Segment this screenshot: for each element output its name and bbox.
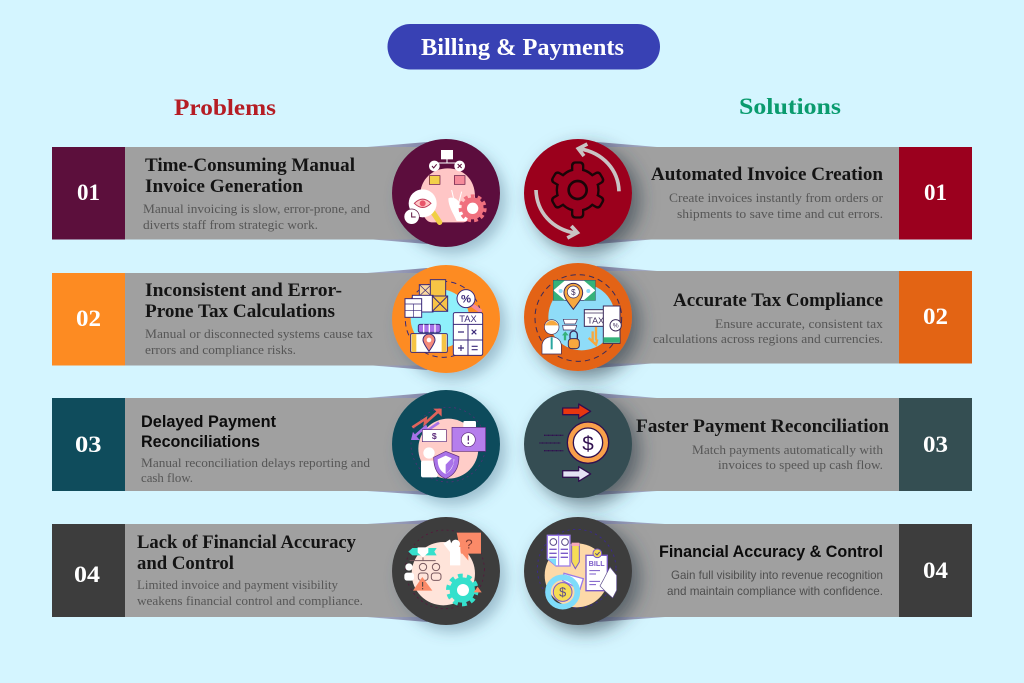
solution 04 description bbox=[667, 568, 883, 598]
solution 01 description: shipments to save time and cut errors. bbox=[677, 206, 883, 221]
title pill bbox=[388, 24, 660, 70]
solution 02 description bbox=[653, 316, 884, 346]
number box 03: 03 bbox=[75, 432, 102, 457]
problem 03 circle bbox=[392, 390, 500, 498]
heading: solutions: Solutions bbox=[739, 94, 841, 120]
number box 02 bbox=[52, 273, 125, 366]
panel: solution 04 bbox=[524, 517, 972, 625]
problem 03 heading bbox=[141, 412, 276, 451]
problem 03 description bbox=[141, 455, 371, 485]
icon: bill, coin and checklist bbox=[537, 529, 617, 608]
panel: solution 03 bbox=[524, 390, 972, 498]
heading: problems: Problems bbox=[174, 95, 276, 121]
number box 03 bbox=[899, 398, 972, 491]
problem 03 heading: Reconciliations bbox=[141, 432, 260, 451]
solution 03 description: Match payments automatically with bbox=[692, 442, 884, 457]
problem 04 description: Limited invoice and payment visibility bbox=[137, 577, 338, 592]
problem 02 description: Manual or disconnected systems cause tax bbox=[145, 326, 374, 341]
icon: money pin, person and tax document: % bbox=[613, 323, 619, 330]
panel: problem 01 bbox=[52, 139, 500, 247]
solution 01 description bbox=[669, 190, 884, 221]
problem 04 circle bbox=[392, 517, 500, 625]
solution 04 heading: Financial Accuracy & Control bbox=[659, 542, 883, 561]
panel: problem 03 bbox=[52, 390, 500, 498]
problem 02 description bbox=[145, 326, 374, 357]
number box 02: 02 bbox=[923, 304, 948, 329]
number box 03: 03 bbox=[923, 432, 948, 457]
icon: money pin, person and tax document bbox=[535, 275, 622, 361]
panel: problem 02 bbox=[52, 265, 500, 373]
solution 02 description: Ensure accurate, consistent tax bbox=[715, 316, 884, 331]
number box 04: 04 bbox=[74, 562, 101, 587]
problem 02 heading bbox=[145, 281, 342, 322]
problem 01 heading: Time-Consuming Manual bbox=[145, 156, 355, 176]
number box 02 bbox=[899, 271, 972, 364]
solution 03 circle bbox=[524, 390, 632, 498]
icon: money pin, person and tax document: TAX bbox=[587, 316, 605, 325]
problem 04 heading: and Control bbox=[137, 554, 234, 574]
solution 03 description bbox=[692, 442, 884, 472]
solution 02 circle bbox=[524, 263, 632, 371]
solution 03 heading: Faster Payment Reconciliation bbox=[636, 417, 890, 437]
icon: tax calculator, boxes and store: % bbox=[461, 294, 471, 306]
icon: org chart, question and gear bbox=[404, 530, 484, 609]
solution 01 heading: Automated Invoice Creation bbox=[651, 165, 884, 185]
problem 01 description: Manual invoicing is slow, error-prone, and bbox=[143, 201, 371, 216]
number box 04 bbox=[52, 524, 125, 617]
problem 04 description bbox=[137, 577, 363, 608]
problem 03 description: cash flow. bbox=[141, 470, 193, 485]
number box 01: 01 bbox=[77, 180, 100, 205]
icon: org chart, question and gear: ? bbox=[465, 537, 473, 552]
number box 03 bbox=[52, 398, 125, 491]
number box 01: 01 bbox=[924, 180, 947, 205]
icon: tax calculator, boxes and store: TAX bbox=[459, 314, 477, 324]
problem 02 circle bbox=[392, 265, 500, 373]
solution 01 circle bbox=[524, 139, 632, 247]
number box 01 bbox=[899, 147, 972, 240]
solution 03 description: invoices to speed up cash flow. bbox=[718, 457, 883, 472]
problem 01 description: diverts staff from strategic work. bbox=[143, 217, 318, 232]
problem 03 description: Manual reconciliation delays reporting and bbox=[141, 455, 371, 470]
icon: workflow, magnifier, snail and gear bbox=[404, 150, 485, 224]
panel: solution 01 bbox=[524, 139, 972, 247]
problem 04 heading bbox=[137, 533, 357, 574]
icon: tax calculator, boxes and store bbox=[405, 280, 483, 357]
solution 04 description: and maintain compliance with confidence. bbox=[667, 584, 883, 598]
problem 04 heading: Lack of Financial Accuracy bbox=[137, 533, 357, 553]
icon: gear with cycle arrows bbox=[536, 144, 619, 238]
problem 01 heading: Invoice Generation bbox=[145, 177, 304, 197]
icon: trend arrows, briefcase and shield bbox=[411, 407, 486, 482]
problem 02 description: errors and compliance risks. bbox=[145, 342, 296, 357]
problem 02 heading: Inconsistent and Error- bbox=[145, 281, 342, 301]
problem 03 heading: Delayed Payment bbox=[141, 412, 276, 431]
panel: problem 04 bbox=[52, 517, 500, 625]
solution 04 description: Gain full visibility into revenue recognition bbox=[671, 568, 883, 582]
number box 04: 04 bbox=[923, 558, 949, 583]
number box 01 bbox=[52, 147, 125, 240]
icon: money pin, person and tax document: $ bbox=[571, 288, 576, 297]
icon: bill, coin and checklist: BILL bbox=[589, 559, 605, 568]
solution 02 heading: Accurate Tax Compliance bbox=[673, 291, 883, 311]
problem 01 heading bbox=[145, 156, 355, 197]
number box 04 bbox=[899, 524, 972, 617]
icon: coin with speed lines and arrows: $ bbox=[582, 432, 594, 455]
icon: bill, coin and checklist: $ bbox=[559, 586, 566, 600]
icon: trend arrows, briefcase and shield: $ bbox=[432, 431, 437, 441]
title pill: Billing & Payments bbox=[421, 35, 624, 61]
problem 01 description bbox=[143, 201, 371, 232]
solution 04 circle bbox=[524, 517, 632, 625]
icon: coin with speed lines and arrows bbox=[539, 404, 609, 481]
problem 01 circle bbox=[392, 139, 500, 247]
problem 02 heading: Prone Tax Calculations bbox=[145, 302, 335, 322]
number box 02: 02 bbox=[76, 306, 101, 331]
problem 04 description: weakens financial control and compliance. bbox=[137, 593, 363, 608]
solution 02 description: calculations across regions and currencies. bbox=[653, 331, 883, 346]
panel: solution 02 bbox=[524, 263, 972, 371]
solution 01 description: Create invoices instantly from orders or bbox=[669, 190, 884, 205]
